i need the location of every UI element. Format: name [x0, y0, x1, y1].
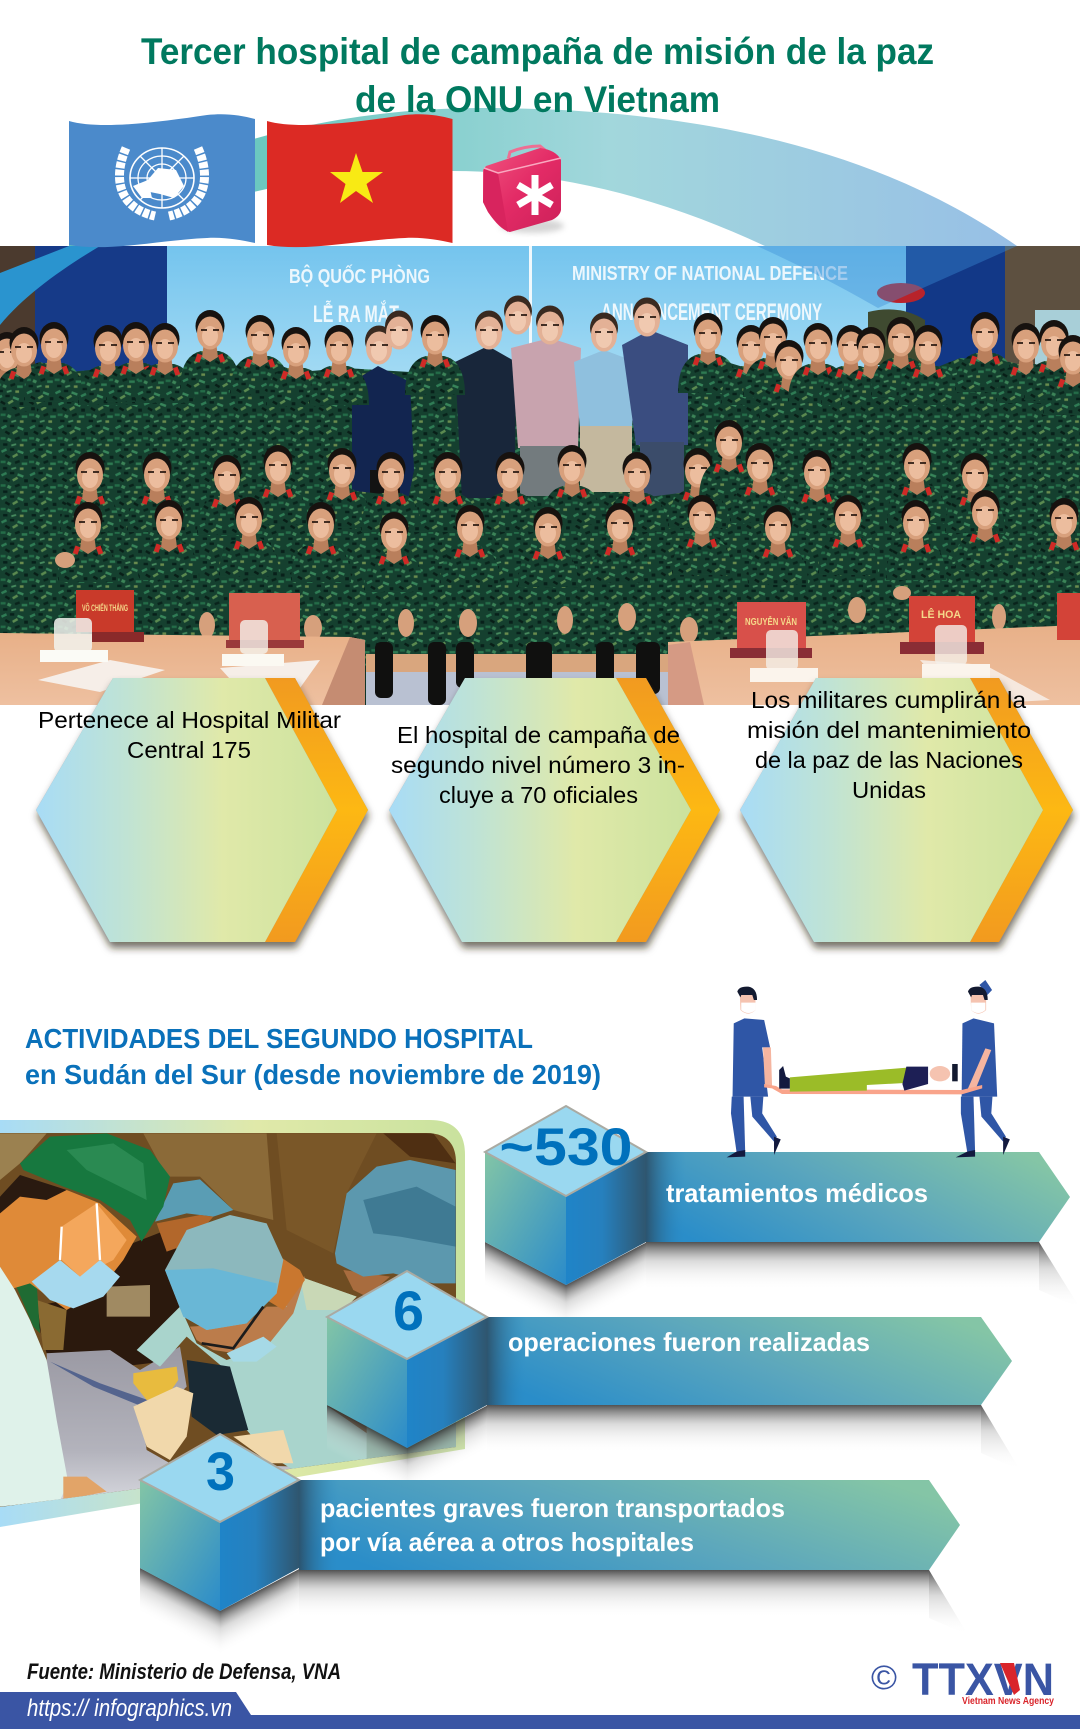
cube with 6: 6 — [393, 1279, 424, 1342]
stretcher and patient — [764, 1064, 982, 1094]
Vietnam flag — [267, 114, 452, 247]
footer bar — [0, 1692, 1080, 1729]
stat row: operations: operaciones fueron realizadas — [508, 1327, 870, 1357]
section heading — [25, 1023, 601, 1090]
surgery illustration — [0, 1120, 467, 1527]
UN flag — [69, 114, 255, 247]
screen text: LỄ RA MẮT — [313, 299, 399, 328]
standing soldiers camouflage — [0, 358, 1080, 498]
panel: hexagon peacekeeping mission: Unidas — [852, 777, 926, 803]
group photo — [0, 246, 1080, 705]
screen text: MINISTRY OF NATIONAL DEFENCE — [572, 263, 848, 285]
panel: hexagon field hospital: cluye a 70 oficiales — [439, 782, 638, 808]
dignitaries in suits — [352, 332, 688, 498]
cube with 3 — [140, 1434, 299, 1656]
stat row: medical treatments — [485, 1106, 1080, 1330]
panel: hexagon military hospital — [36, 678, 368, 942]
yellow box and hands — [133, 1367, 293, 1463]
grey drape — [46, 1346, 300, 1500]
cube with 3: 3 — [206, 1442, 235, 1502]
name placards and mugs: NGUYỄN VĂN — [745, 615, 797, 628]
screen text: BỘ QUỐC PHÒNG — [289, 264, 430, 288]
stat row: air transport — [140, 1434, 968, 1656]
white gown — [0, 1267, 68, 1507]
right medic — [956, 980, 1010, 1157]
panel: hexagon peacekeeping mission — [740, 678, 1073, 942]
name placards and mugs — [40, 590, 1080, 682]
title: de la ONU en Vietnam — [355, 79, 720, 120]
stat row: operations — [327, 1271, 1020, 1493]
front row faces — [58, 490, 1080, 592]
left surgeon — [0, 1133, 170, 1310]
stat row: air transport: por vía aérea a otros hospitales — [320, 1527, 694, 1557]
cube with 6 — [327, 1271, 487, 1493]
cube with ~530 — [485, 1106, 646, 1330]
panel: hexagon military hospital: Pertenece al Hospital Militar — [38, 707, 341, 733]
name placards and mugs: LÊ HOA — [921, 608, 961, 621]
screen text — [290, 264, 848, 322]
center surgeon — [137, 1215, 377, 1470]
arc ribbon — [0, 108, 1017, 325]
logo: TTXVN Vietnam News Agency: Vietnam News Agency — [962, 1696, 1054, 1707]
icon: medics carrying stretcher — [727, 980, 1010, 1157]
panel: hexagon military hospital: Central 175 — [127, 737, 251, 763]
panel: hexagon peacekeeping mission: Los militares cumplirán la — [751, 687, 1026, 713]
back row faces — [0, 296, 1080, 420]
panel: hexagon peacekeeping mission: de la paz de las Naciones — [755, 747, 1023, 773]
floor and boots — [366, 642, 668, 705]
logo: TTXVN Vietnam News Agency: © — [871, 1659, 897, 1697]
icon: UN emblem — [119, 148, 205, 216]
stat row: air transport: pacientes graves fueron transportados — [320, 1493, 785, 1523]
conference tables — [0, 625, 1080, 705]
hands on knees — [55, 552, 1006, 643]
cube with ~530: ~530 — [500, 1118, 632, 1177]
section heading: en Sudán del Sur (desde noviembre de 2019) — [25, 1059, 601, 1090]
stat row: medical treatments: tratamientos médicos — [666, 1178, 928, 1208]
icon: first aid case — [483, 146, 564, 233]
panel: hexagon field hospital: segundo nivel número 3 in- — [391, 752, 685, 778]
icon: yellow star — [330, 153, 383, 203]
seated soldiers camouflage — [356, 491, 680, 666]
screen text: ANNOUNCEMENT CEREMONY — [601, 299, 822, 326]
panel: hexagon peacekeeping mission: misión del mantenimiento — [747, 717, 1031, 743]
title: Tercer hospital de campaña de misión de la paz — [141, 31, 934, 72]
panel: hexagon field hospital: El hospital de campaña de — [397, 722, 680, 748]
right surgeon — [335, 1160, 456, 1297]
footer bar: https:// infographics.vn — [27, 1695, 232, 1722]
panel: hexagon field hospital — [389, 678, 720, 942]
middle row faces — [60, 420, 1005, 535]
section heading: ACTIVIDADES DEL SEGUNDO HOSPITAL — [25, 1023, 533, 1054]
source: Fuente: Ministerio de Defensa, VNA — [27, 1659, 341, 1684]
name placards and mugs: VÕ CHIẾN THẮNG — [82, 603, 128, 613]
logo: TTXVN Vietnam News Agency: TTXVN — [912, 1654, 1054, 1705]
title — [141, 31, 934, 120]
surgeon behind — [155, 1179, 233, 1252]
left medic — [727, 987, 781, 1157]
